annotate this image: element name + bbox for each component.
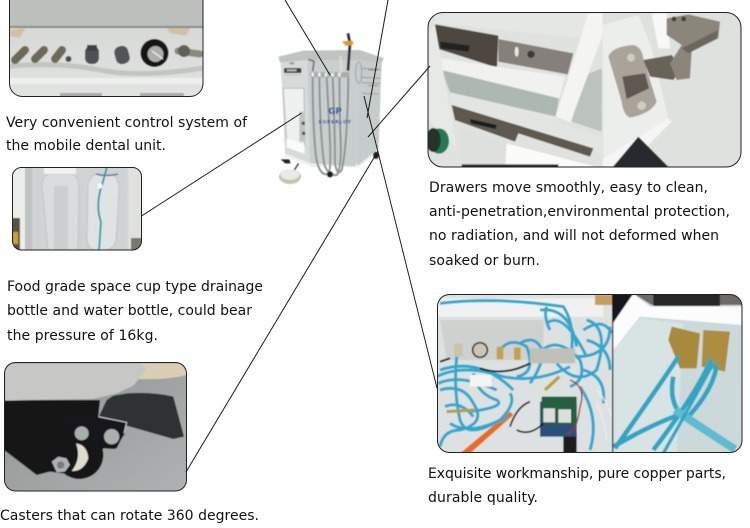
icon: caster wheel: [52, 443, 88, 472]
opening for bottles: [283, 88, 305, 147]
text: drawers caption: anti-penetration,environmental protection,: [429, 204, 730, 220]
text: control system caption: Very convenient control system of: [6, 115, 248, 131]
panel: control system photo: [9, 0, 204, 98]
text: control system caption: [6, 115, 248, 154]
text: workmanship caption: Exquisite workmanship, pure copper parts,: [428, 466, 726, 482]
icon: green knob: [434, 128, 450, 154]
drawers: [362, 68, 381, 94]
photo: copper connectors side: [613, 293, 743, 453]
icon: blue tubing: [437, 301, 612, 450]
icon: casters: [281, 152, 379, 177]
text: control system caption: the mobile dental unit.: [6, 138, 166, 154]
label: brand logo on cabinet: SUPERLOY: [318, 119, 352, 125]
icon: toggle switches: [15, 50, 200, 60]
icon: lower rail: [452, 105, 593, 157]
panel: caster photo: [3, 362, 190, 493]
icon: curing light: [341, 33, 353, 73]
icon: instrument holder: [310, 72, 349, 77]
icon: upper rail: [435, 24, 573, 74]
icon: drainage bottle: [44, 168, 78, 248]
text: bottles caption: the pressure of 16kg.: [7, 328, 158, 344]
icon: rotary knobs: [85, 39, 168, 67]
text: drawers caption: no radiation, and will not deformed when: [429, 228, 719, 244]
icon: brake lever: [98, 393, 184, 439]
icon: hanging hoses: [313, 77, 348, 175]
icon: circuit board: [510, 380, 582, 437]
text: drawers caption: soaked or burn.: [429, 253, 540, 269]
text: workmanship caption: durable quality.: [428, 490, 538, 506]
text: bottles caption: bottle and water bottle, could bear: [7, 303, 252, 319]
icon: gauges and fittings: [440, 343, 575, 412]
panel: wiring and copper parts photo: [437, 293, 743, 453]
text: bottles caption: Food grade space cup type drainage: [7, 279, 263, 295]
black caster body: [4, 400, 125, 476]
illustration: mobile dental unit: [278, 33, 384, 184]
panel: drawer rails and hinge photo: [425, 12, 743, 168]
panel: bottles photo: [12, 167, 142, 251]
icon: foot pedal: [279, 163, 301, 184]
text: drawers caption: [429, 180, 730, 269]
label: brand logo on cabinet: [318, 107, 352, 125]
label: brand logo on cabinet: GP: [328, 107, 342, 117]
icon: hinge: [608, 14, 720, 118]
text: caster caption: Casters that can rotate 360 degrees.: [0, 508, 259, 524]
leader lines: [142, 0, 437, 472]
text: workmanship caption: [428, 466, 726, 506]
text: bottles caption: [7, 279, 263, 344]
display panel: [284, 68, 301, 73]
text: drawers caption: Drawers move smoothly, easy to clean,: [429, 180, 708, 196]
icon: water bottle: [87, 167, 119, 250]
